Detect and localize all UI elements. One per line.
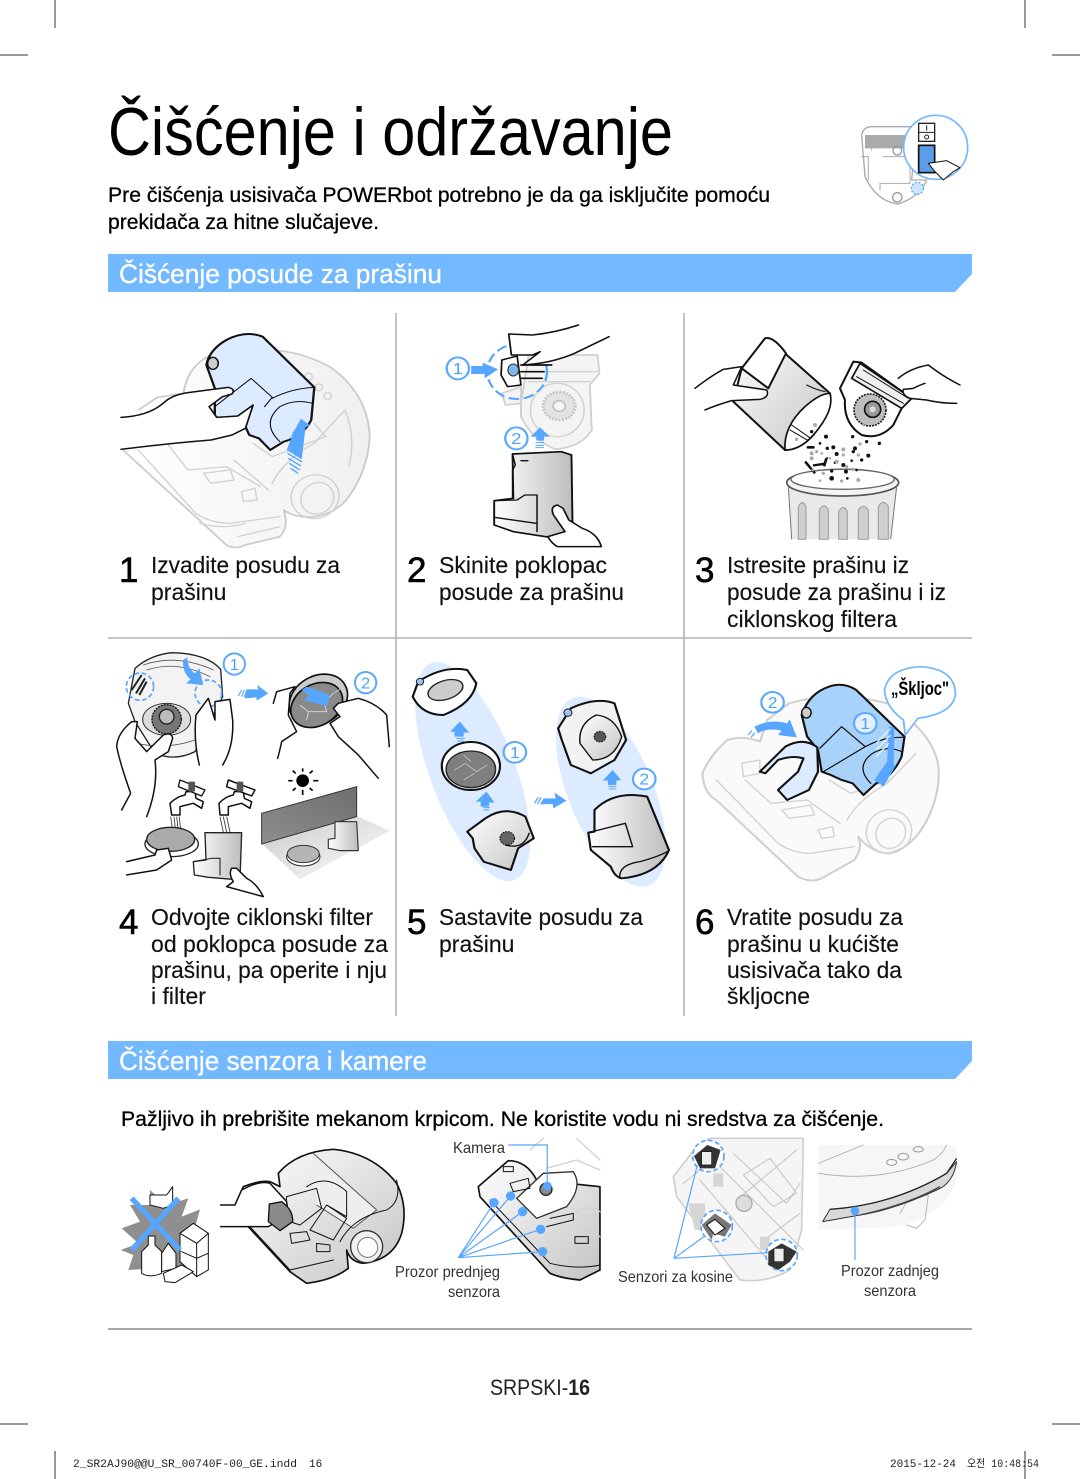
label: cliff sensors: Senzori za kosine bbox=[618, 1269, 733, 1286]
dashed sensor markers bbox=[693, 1140, 797, 1271]
hands bbox=[121, 387, 253, 449]
marker 2: 2 bbox=[361, 676, 370, 693]
markers bbox=[761, 692, 877, 734]
label: rear sensor window bbox=[841, 1263, 939, 1300]
hand holding container bbox=[548, 505, 601, 547]
step 3 caption: 3 bbox=[695, 551, 714, 590]
panel: step 3 illustration bbox=[695, 338, 960, 539]
label: rear sensor window: senzora bbox=[864, 1283, 916, 1300]
marker 1: 1 bbox=[230, 657, 239, 674]
arrows and markers: 2 bbox=[639, 770, 649, 788]
marker 2 bbox=[505, 427, 550, 449]
page number: SRPSKI-16 bbox=[490, 1375, 590, 1400]
step 3 caption: Istresite prašinu iz bbox=[727, 552, 909, 578]
markers: 1 bbox=[860, 715, 870, 733]
title: Čišćenje i održavanje bbox=[108, 94, 673, 170]
drying scene bbox=[262, 787, 390, 879]
step 2 caption bbox=[407, 551, 624, 605]
footer date: 2015-12-24 bbox=[890, 1459, 956, 1471]
sensor instruction: Pažljivo ih prebrišite mekanom krpicom. Ne koristite vodu ni sredstva za čišćenje. bbox=[121, 1107, 884, 1131]
step 4 caption: prašinu, pa operite i nju bbox=[151, 957, 387, 983]
step 2 caption: posude za prašinu bbox=[439, 579, 624, 605]
trash can bbox=[787, 469, 899, 539]
hand with cloth bbox=[221, 1182, 293, 1231]
panel: step 5 illustration bbox=[391, 650, 688, 899]
footer file name: 16 bbox=[309, 1459, 322, 1471]
faucets bbox=[170, 780, 255, 840]
robot underside camera view bbox=[478, 1137, 600, 1280]
marker 1: 1 bbox=[453, 359, 463, 378]
step 6 caption: 6 bbox=[695, 903, 714, 942]
arrow right bbox=[238, 685, 268, 701]
step 5 caption: Sastavite posudu za bbox=[439, 904, 643, 930]
step 2 caption: 2 bbox=[407, 551, 426, 590]
step 1 caption bbox=[119, 551, 340, 605]
bottom rule bbox=[108, 1328, 972, 1330]
step 4 caption: Odvojte ciklonski filter bbox=[151, 904, 373, 930]
latch and hand bbox=[501, 325, 609, 387]
marker 1 bbox=[224, 653, 245, 675]
dashed highlight bbox=[487, 344, 547, 399]
speech bubble bbox=[885, 667, 955, 735]
section heading bar: sensors: Čišćenje senzora i kamere bbox=[119, 1045, 427, 1076]
bubble text: „Škljoc" bbox=[891, 678, 949, 700]
markers: 2 bbox=[768, 694, 777, 712]
right hand bbox=[898, 365, 960, 403]
blue ellipses bbox=[391, 650, 688, 899]
grey dust bbox=[795, 423, 865, 483]
cone part bbox=[467, 811, 534, 870]
marker 2 bbox=[355, 672, 376, 693]
dashed markers and curved arrow bbox=[126, 657, 222, 707]
filter mesh bbox=[280, 664, 357, 737]
step 1 caption: 1 bbox=[119, 551, 138, 590]
section heading bar: sensors bbox=[108, 1041, 972, 1079]
ring part bbox=[413, 669, 476, 715]
step 4 caption: 4 bbox=[119, 903, 138, 942]
arrows and markers: 1 bbox=[510, 744, 520, 762]
insert arrow bbox=[874, 727, 896, 787]
arrows and markers bbox=[450, 722, 656, 810]
step 6 caption: Vratite posudu za bbox=[727, 904, 903, 930]
grid lines bbox=[108, 313, 972, 1016]
intro text bbox=[108, 183, 770, 234]
icon: power switch on robot underside bbox=[862, 115, 968, 204]
panel: step 1 illustration bbox=[121, 334, 370, 547]
panel: cliff and rear sensor views bbox=[673, 1138, 957, 1281]
step 5 caption bbox=[407, 903, 643, 957]
sensor lines bbox=[674, 1165, 768, 1258]
robot body bbox=[702, 697, 939, 880]
panel: step 6 illustration bbox=[702, 667, 955, 880]
step 4 caption bbox=[119, 903, 388, 1009]
label: rear sensor window: Prozor zadnjeg bbox=[841, 1263, 939, 1280]
step 3 caption: ciklonskog filtera bbox=[727, 606, 897, 632]
step 6 caption: prašinu u kućište bbox=[727, 931, 899, 957]
dust bin being inserted bbox=[802, 685, 905, 795]
icon: no detergents bbox=[121, 1187, 208, 1283]
falling dust bbox=[804, 430, 881, 481]
robot underside bbox=[673, 1138, 803, 1281]
label: front sensor window bbox=[395, 1264, 500, 1301]
footer date: 오전 10:48:54 bbox=[967, 1457, 1039, 1471]
filter being detached bbox=[128, 653, 223, 757]
cyclone filter bbox=[840, 362, 912, 436]
rear sensor view bbox=[818, 1145, 957, 1260]
step 6 caption bbox=[695, 903, 903, 1009]
intro text: prekidača za hitne slučajeve. bbox=[108, 210, 379, 234]
assembled part bbox=[558, 701, 626, 773]
step 3 caption: posude za prašinu i iz bbox=[727, 579, 946, 605]
robot body bbox=[123, 351, 370, 547]
grey filter bbox=[502, 355, 599, 449]
label: camera: Kamera bbox=[453, 1140, 505, 1157]
dust bin bbox=[206, 334, 314, 450]
label: front sensor window: Prozor prednjeg bbox=[395, 1264, 500, 1281]
left hand bbox=[695, 367, 767, 410]
section heading bar: dust bin: Čišćenje posude za prašinu bbox=[119, 258, 442, 289]
curved arrow bbox=[748, 719, 797, 737]
arrow up bbox=[284, 419, 310, 473]
washed filter disc bbox=[127, 827, 198, 875]
marker 2: 2 bbox=[511, 429, 521, 448]
dust container bbox=[494, 452, 573, 537]
panel: step 2 illustration bbox=[447, 325, 609, 547]
panel: sensor cleaning illustrations bbox=[121, 1137, 600, 1283]
container part bbox=[588, 795, 669, 878]
step 4 caption: od poklopca posude za bbox=[151, 931, 388, 957]
section heading bar: dust bin bbox=[108, 254, 972, 292]
hands on mesh bbox=[273, 687, 297, 758]
step 3 caption bbox=[695, 551, 946, 632]
step 1 caption: prašinu bbox=[151, 579, 226, 605]
marker 1 bbox=[447, 357, 498, 379]
footer date bbox=[890, 1457, 1039, 1471]
step 5 caption: 5 bbox=[407, 903, 426, 942]
footer file name: 2_SR2AJ90@@U_SR_00740F-00_GE.indd bbox=[73, 1459, 297, 1471]
filter part bbox=[442, 742, 500, 790]
emptied container bbox=[733, 338, 831, 450]
intro text: Pre čišćenja usisivača POWERbot potrebno je da ga isključite pomoću bbox=[108, 183, 770, 207]
step 6 caption: usisivača tako da bbox=[727, 957, 902, 983]
washed bin bbox=[193, 833, 263, 897]
step 4 caption: i filter bbox=[151, 983, 206, 1009]
sun icon bbox=[288, 768, 318, 795]
label: front sensor window: senzora bbox=[448, 1284, 500, 1301]
robot being wiped bbox=[235, 1149, 404, 1283]
step 1 caption: Izvadite posudu za bbox=[151, 552, 340, 578]
hands on filter bbox=[117, 722, 173, 817]
blue arrow on mesh bbox=[302, 687, 330, 706]
step 2 caption: Skinite poklopac bbox=[439, 552, 607, 578]
sensor callout lines bbox=[458, 1145, 552, 1258]
panel: step 4 illustration bbox=[117, 653, 390, 897]
cover handle bbox=[760, 742, 818, 800]
step 5 caption: prašinu bbox=[439, 931, 514, 957]
step 6 caption: škljocne bbox=[727, 983, 810, 1009]
